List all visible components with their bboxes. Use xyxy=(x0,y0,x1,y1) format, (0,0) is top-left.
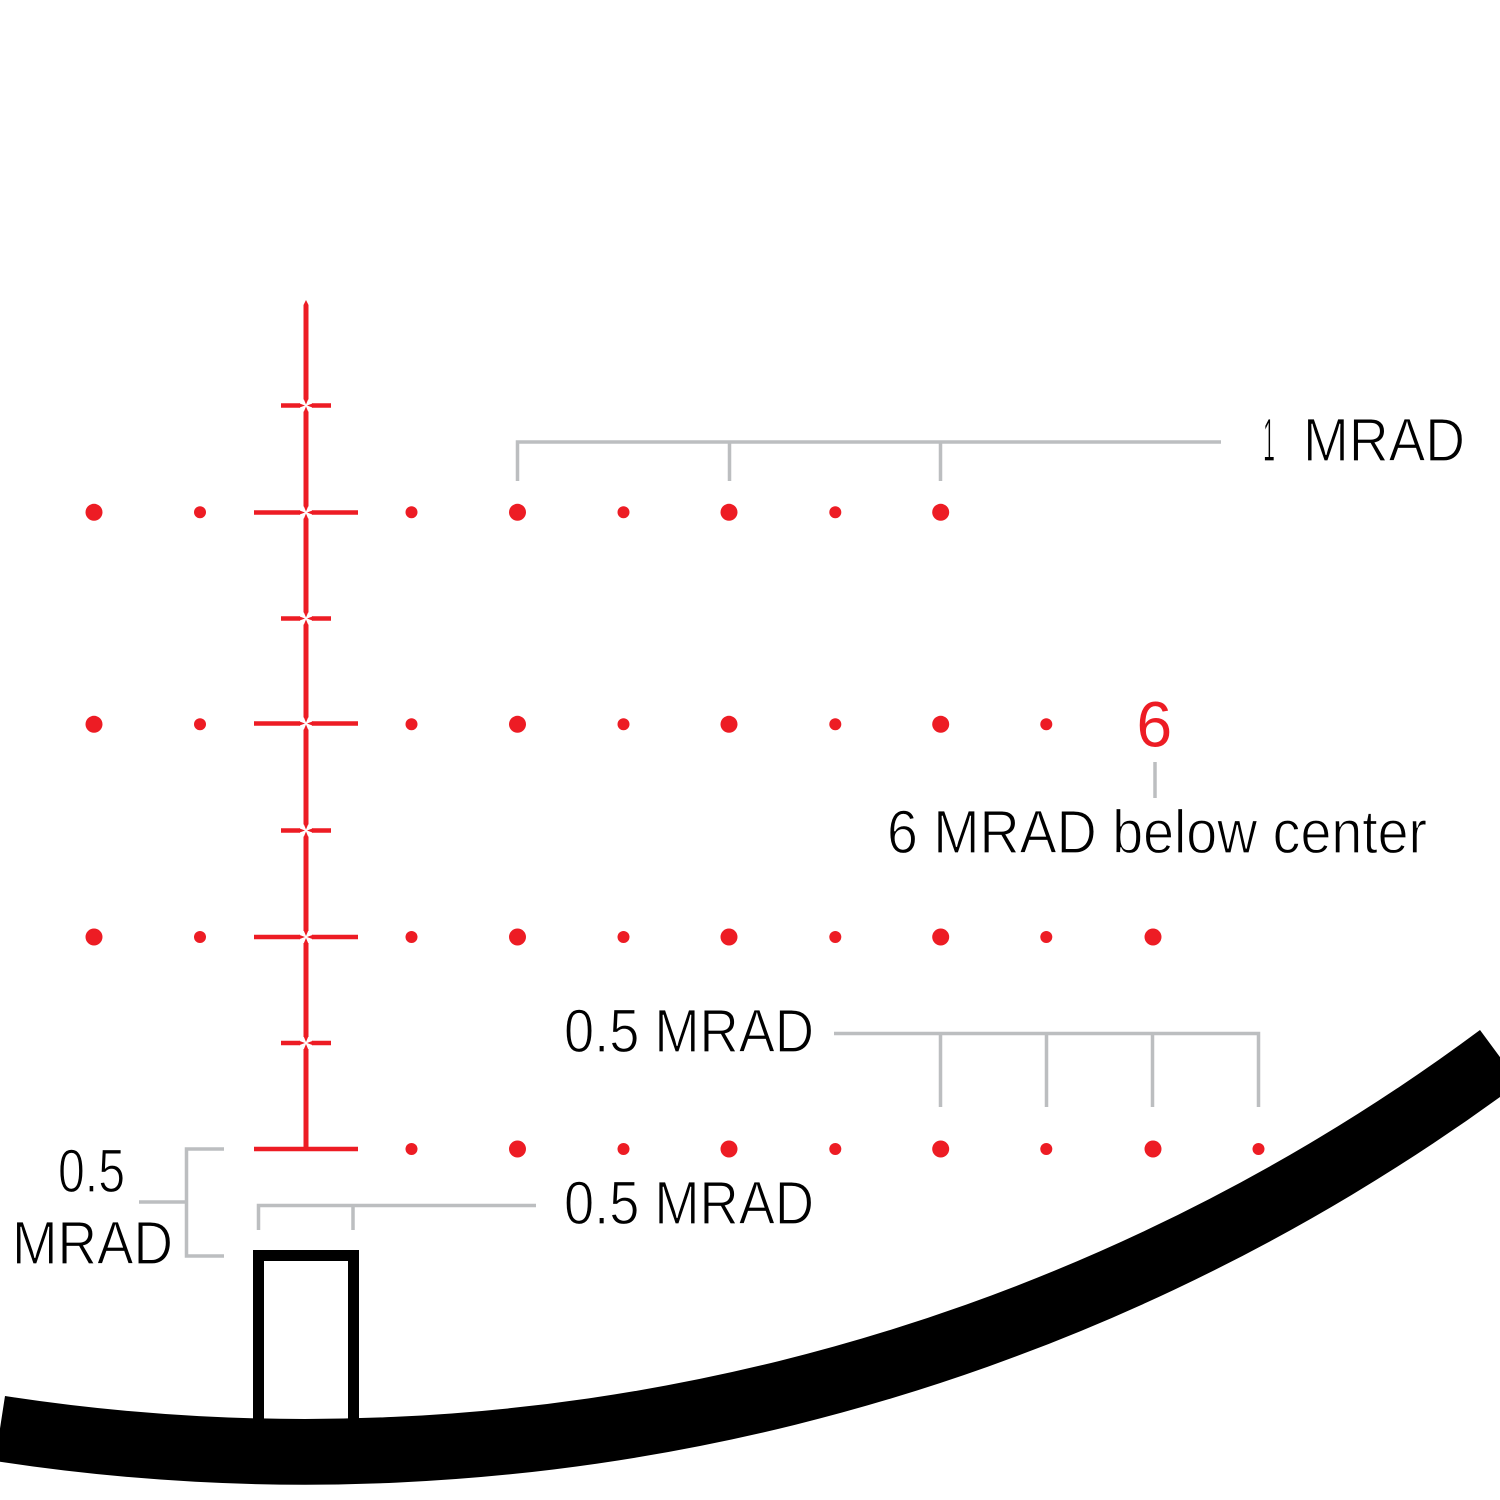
leader line for 6 xyxy=(1153,762,1157,798)
black post xyxy=(258,1256,354,1425)
bracket: 0.5 MRAD vertical gap xyxy=(139,1149,224,1256)
bracket: 1 MRAD xyxy=(518,442,1221,481)
label: 0.5 MRAD left xyxy=(12,1137,173,1277)
dot row 4 xyxy=(406,1140,1264,1158)
label: 1 MRAD: 1 xyxy=(1263,406,1275,474)
label: 0.5 MRAD left: 0.5 xyxy=(58,1137,125,1205)
vertical stadia with hash marks xyxy=(254,300,358,1149)
dot row 2 xyxy=(86,716,1052,733)
label: 6 MRAD below center: 6 MRAD below center xyxy=(887,798,1427,866)
dot row 1 xyxy=(86,504,949,521)
bracket: 0.5 MRAD post width xyxy=(258,1206,536,1230)
label: 0.5 MRAD upper: 0.5 MRAD xyxy=(564,997,814,1065)
label: 0.5 MRAD left: MRAD xyxy=(12,1209,173,1277)
bracket: 0.5 MRAD upper xyxy=(834,1034,1258,1107)
label: 0.5 MRAD lower: 0.5 MRAD xyxy=(564,1169,814,1237)
scope edge arc xyxy=(0,1030,1500,1485)
label: 1 MRAD: MRAD xyxy=(1303,406,1465,474)
dot row 3 xyxy=(86,928,1162,946)
red number 6: 6 xyxy=(1136,688,1172,760)
